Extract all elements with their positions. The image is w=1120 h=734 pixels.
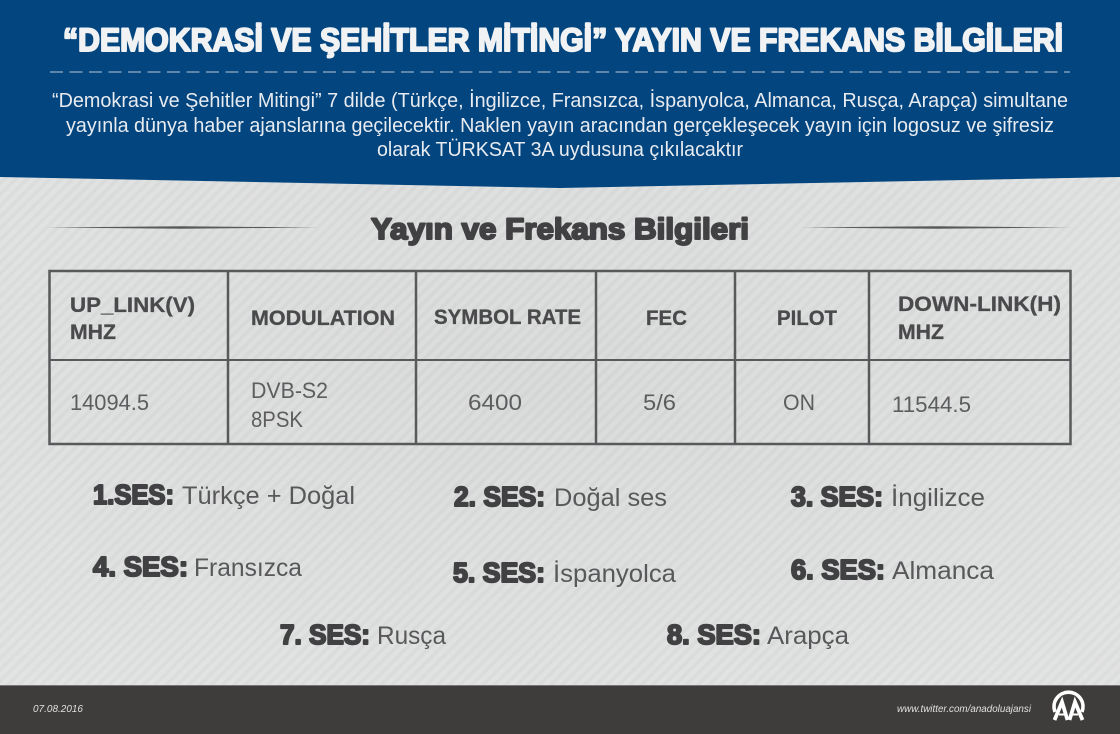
table header row: MODULATION [251, 306, 395, 330]
channel 5 [453, 557, 676, 588]
heading text: Yayın ve Frekans Bilgileri [371, 213, 749, 246]
channel 6: Almanca [892, 557, 994, 585]
channel 5: İspanyolca [553, 559, 676, 588]
footer bar [0, 685, 1120, 734]
date: 07.08.2016 [33, 704, 83, 715]
table header row: MHZ [898, 320, 944, 344]
table header row: FEC [646, 306, 687, 330]
intro text [52, 89, 1068, 161]
channel 5: 5. SES: [453, 557, 545, 588]
background [0, 170, 1120, 690]
table value row: ON [783, 390, 815, 415]
channel 8: 8. SES: [667, 619, 761, 650]
table value row: DVB-S2 [251, 378, 328, 403]
dashed divider [50, 71, 1070, 73]
table value row: 6400 [468, 390, 522, 415]
channel 6: 6. SES: [791, 554, 885, 585]
table grid [50, 271, 1070, 444]
intro text: yayınla dünya haber ajanslarına geçilecektir. Naklen yayın aracından gerçekleşecek yayın için logosuz ve şifresiz [66, 114, 1054, 137]
channel 4 [93, 551, 302, 582]
table header row: MHZ [70, 320, 116, 344]
channel 3: İngilizce [891, 483, 985, 512]
icon: AA logo [1054, 692, 1083, 720]
table header row: SYMBOL RATE [434, 305, 581, 329]
channel 1: Türkçe + Doğal [182, 482, 355, 510]
channel 2: Doğal ses [554, 484, 667, 512]
channel 2 [454, 481, 667, 512]
table header row: UP_LINK(V) [70, 293, 195, 317]
channel 3 [791, 481, 985, 512]
channel 4: Fransızca [194, 554, 302, 582]
table header row [70, 292, 1061, 344]
table value row: 11544.5 [892, 392, 971, 417]
title: “DEMOKRASİ VE ŞEHİTLER MİTİNGİ” YAYIN VE FREKANS BİLGİLERİ [63, 22, 1063, 58]
channel 2: 2. SES: [454, 481, 545, 512]
table header row: DOWN-LINK(H) [898, 292, 1061, 316]
intro text: olarak TÜRKSAT 3A uydusuna çıkılacaktır [377, 138, 743, 161]
table value row [70, 378, 971, 432]
channel 7: 7. SES: [280, 619, 370, 650]
channel 1: 1.SES: [93, 479, 174, 510]
table value row: 14094.5 [70, 390, 149, 415]
header band [0, 0, 1120, 188]
channel 8 [667, 619, 849, 650]
table value row: 8PSK [251, 407, 303, 432]
channel 6 [791, 554, 994, 585]
channel 8: Arapça [767, 622, 849, 650]
frequency table [50, 271, 1070, 444]
channel 1 [93, 479, 355, 510]
channel 4: 4. SES: [93, 551, 188, 582]
channel 7: Rusça [377, 622, 446, 650]
twitter url: www.twitter.com/anadoluajansi [897, 704, 1032, 715]
audio channel list [93, 479, 994, 650]
channel 7 [280, 619, 446, 650]
table header row: PILOT [777, 306, 837, 330]
channel 3: 3. SES: [791, 481, 883, 512]
intro text: “Demokrasi ve Şehitler Mitingi” 7 dilde (Türkçe, İngilizce, Fransızca, İspanyolca, Almanca, Rusça, Arapça) simultane [52, 89, 1068, 112]
table value row: 5/6 [643, 390, 676, 415]
